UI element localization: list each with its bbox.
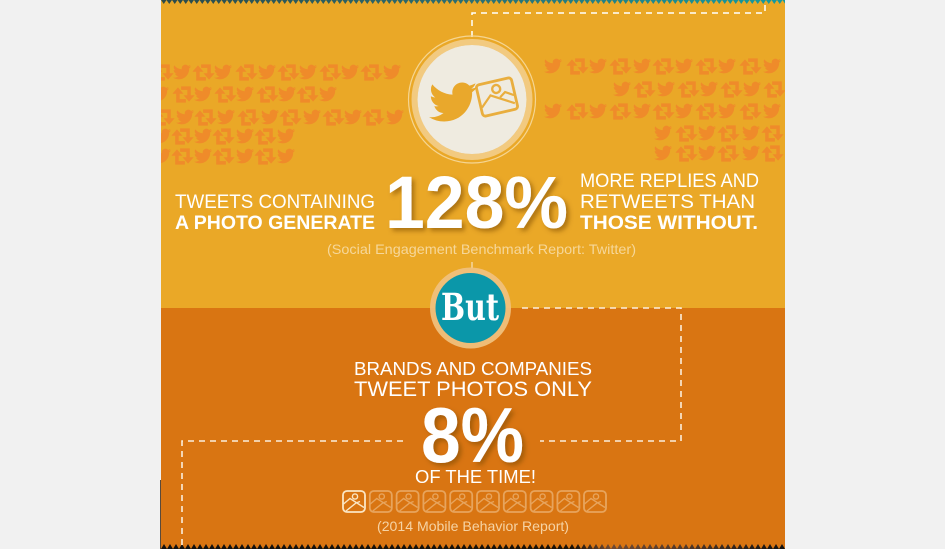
- source: social engagement benchmark report: (Social Engagement Benchmark Report: Twitter): [327, 241, 636, 257]
- stat: 128%: 128%: [385, 161, 568, 244]
- badge: But: [430, 268, 511, 348]
- icon pattern: left bird and retweet rows: [151, 65, 404, 164]
- text: of the time: OF THE TIME!: [415, 467, 536, 487]
- bottom serrated edge: [161, 544, 785, 549]
- left edge line: [160, 480, 161, 549]
- badge: But: But: [441, 285, 499, 329]
- icon row: 1 of 10 photos highlighted: [343, 491, 606, 512]
- icon: bird carrying a photo in a circle: [408, 36, 536, 163]
- top serrated edge: [161, 0, 785, 4]
- text: more replies and retweets than those without: RETWEETS THAN: [580, 192, 755, 213]
- stat: 8%: 8%: [421, 391, 524, 479]
- text: more replies and retweets than those without: [580, 171, 759, 234]
- source: 2014 mobile behavior report: (2014 Mobile Behavior Report): [377, 518, 569, 534]
- panel: top section background: [161, 0, 785, 308]
- text: more replies and retweets than those without: THOSE WITHOUT.: [580, 213, 758, 234]
- icon pattern: right bird and retweet rows: [544, 59, 786, 161]
- panel: bottom section background: [161, 308, 785, 549]
- dashed connector: middle and bottom: [182, 308, 681, 549]
- text: brands and companies tweet photos only: [354, 358, 592, 401]
- text: tweets containing a photo generate: [175, 192, 375, 234]
- connector tick above But: [472, 262, 473, 269]
- dashed connector: top: [472, 1, 765, 37]
- text: brands and companies tweet photos only: BRANDS AND COMPANIES: [354, 358, 592, 379]
- text: tweets containing a photo generate: A PHOTO GENERATE: [175, 213, 375, 234]
- text: tweets containing a photo generate: TWEETS CONTAINING: [175, 192, 375, 213]
- text: more replies and retweets than those without: MORE REPLIES AND: [580, 171, 759, 192]
- text: brands and companies tweet photos only: TWEET PHOTOS ONLY: [354, 378, 592, 401]
